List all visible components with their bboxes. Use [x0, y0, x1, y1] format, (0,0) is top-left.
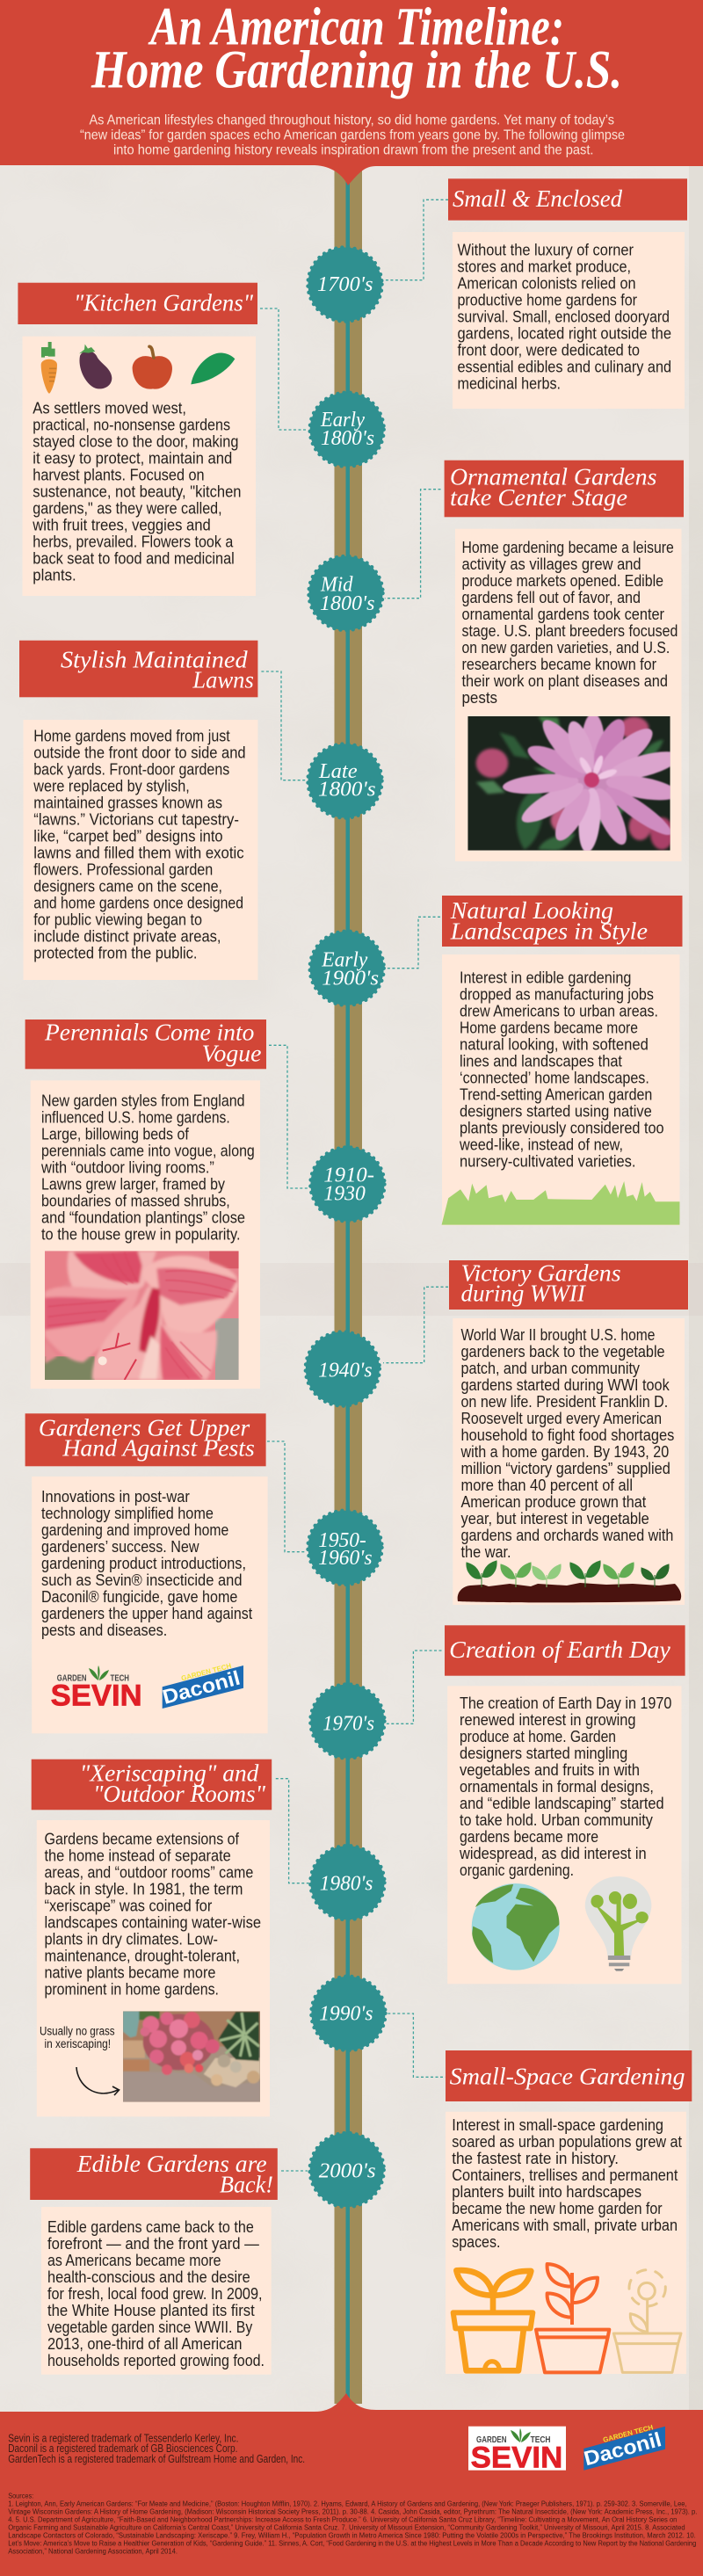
heading: Vogue: [202, 1040, 261, 1066]
heading: [445, 461, 684, 517]
text block: the home instead of separate: [44, 1847, 231, 1865]
text block: plants in dry climates. Low-: [44, 1931, 218, 1948]
badge: 2000's: 2000's: [319, 2159, 376, 2182]
text block: planters built into hardscapes: [452, 2183, 641, 2201]
heading: Small-Space Gardening: [450, 2064, 685, 2090]
text block: gardens," as they were called,: [33, 500, 222, 518]
text block: [459, 969, 664, 1170]
heading: [25, 1413, 266, 1466]
text block: their work on plant diseases and: [462, 672, 668, 690]
heading: "Outdoor Rooms": [93, 1781, 266, 1807]
heading: [30, 2148, 278, 2200]
connector: 1990's: [388, 2014, 446, 2077]
text block: and “foundation plantings” close: [41, 1208, 245, 1226]
connector: 1910-1930: [269, 1045, 308, 1188]
text block: Interest in edible gardening: [460, 969, 631, 986]
text block: lines and landscapes that: [460, 1052, 622, 1070]
logo: Sevin: GARDEN: [57, 1674, 86, 1684]
text block: weed-like, instead of new,: [459, 1136, 623, 1153]
icon: potted plants: [453, 2264, 681, 2372]
photo: pink amaryllis: [45, 1251, 239, 1380]
text block: productive home gardens for: [457, 292, 637, 309]
text block: activity as villages grew and: [462, 555, 641, 573]
text block: back in style. In 1981, the term: [44, 1881, 243, 1898]
text block: stores and market produce,: [457, 258, 631, 276]
text block: As settlers moved west,: [33, 400, 186, 417]
text block: with fruit trees, veggies and: [32, 517, 211, 534]
text block: spaces.: [452, 2233, 500, 2251]
text block: Innovations in post-war: [41, 1488, 190, 1506]
icons: vegetables: [41, 342, 235, 394]
connector: 1970's: [387, 1651, 441, 1723]
text block: prominent in home gardens.: [44, 1981, 219, 1999]
sources: Landscape Contactors of Colorado, “Sustainable Landscaping: Xeriscape.” 9. Frey, William H., “Population Growth in Metro America Since 1980: Putting the Volatile 2000s in Perspective,” The Brookings Institution, March 2012. 10.: [8, 2532, 696, 2540]
intro text: [80, 113, 625, 158]
text block: lawns and filled them with exotic: [33, 844, 244, 861]
card background: [446, 2112, 686, 2374]
photo: xeriscape garden: [123, 2011, 260, 2102]
badge: 1950-1960's: 1950-: [318, 1529, 366, 1552]
footer logo: Sevin: [468, 2427, 566, 2474]
icon: tree light bulb: [585, 1876, 651, 1971]
text block: herbs, prevailed. Flowers took a: [33, 533, 234, 551]
badge: early 1800's: 1800's: [321, 427, 374, 450]
panel: creation of earth day: [445, 1625, 685, 1984]
footer logo: Sevin: SEVIN: [471, 2441, 562, 2474]
text block: landscapes containing water-wise: [44, 1914, 261, 1932]
text block: ornamentals in formal designs,: [460, 1778, 654, 1796]
arrow: [76, 2067, 120, 2095]
text block: [33, 727, 246, 961]
text block: forefront — and the front yard —: [47, 2235, 259, 2253]
footer logo: Daconil: GARDEN TECH: [602, 2423, 654, 2444]
text block: [44, 1831, 261, 1999]
text block: technology simplified home: [41, 1505, 214, 1522]
sources: [8, 2493, 697, 2556]
panel: gardeners get upper hand: [25, 1413, 268, 1733]
card background: [455, 529, 682, 861]
card background: [453, 232, 685, 409]
text block: households reported growing food.: [47, 2352, 265, 2369]
heading: [446, 2050, 692, 2101]
badge: 1950-1960's: 1960's: [318, 1547, 373, 1570]
text block: World War II brought U.S. home: [460, 1326, 655, 1344]
text block: The creation of Earth Day in 1970: [460, 1694, 671, 1712]
text block: pests: [462, 689, 497, 707]
badge: early 1900's: [310, 932, 384, 1005]
card background: [447, 1686, 682, 1984]
sources: 4. 5. U.S. Department of Agriculture, “Faith-Based and Neighborhood Partnerships: Increase Access to Fresh Produce.” 6. University of California Santa Cruz Library, “Timeline: Cultivating a Movement, An Oral History Series on: [8, 2516, 677, 2524]
badge: 1940's: [306, 1332, 380, 1406]
heading: Stylish Maintained: [61, 646, 248, 672]
icon: seedlings in soil: [458, 1561, 681, 1602]
heading: [32, 1760, 272, 1810]
text block: native plants became more: [44, 1964, 215, 1982]
text block: [459, 1694, 671, 1879]
text block: gardens started during WWI took: [460, 1376, 670, 1394]
text block: essential edibles and culinary and: [457, 359, 671, 376]
badge: 1700's: 1700's: [317, 273, 373, 296]
text block: [47, 2218, 265, 2369]
heading: Perennials Come into: [44, 1019, 254, 1045]
trademarks text: [8, 2432, 305, 2465]
text block: became the new home garden for: [452, 2200, 663, 2217]
timeline trunk: [334, 167, 362, 2404]
footer logo: Daconil: Daconil: [582, 2427, 663, 2470]
text block: plants previously considered too: [460, 1119, 664, 1136]
card background: [453, 1318, 685, 1605]
text block: maintenance, drought-tolerant,: [44, 1948, 240, 1965]
badge: 1970's: [310, 1684, 384, 1758]
footer logo: Sevin: GARDEN: [476, 2435, 506, 2445]
text block: the White House planted its first: [47, 2302, 255, 2319]
text block: soared as urban populations grew at: [452, 2133, 682, 2151]
text block: Roosevelt urged every American: [460, 1410, 662, 1427]
heading: Ornamental Gardens: [450, 464, 656, 490]
panel: kitchen gardens: [18, 283, 257, 596]
caption: [40, 2025, 115, 2050]
connector: 1700's: [385, 200, 448, 280]
badge: 1980's: 1980's: [320, 1873, 373, 1896]
text block: to the house grew in popularity.: [41, 1225, 241, 1243]
text block: researchers became known for: [462, 656, 656, 673]
badge: early 1800's: Early: [320, 409, 365, 432]
text block: medicinal herbs.: [457, 375, 561, 393]
heading: Victory Gardens: [460, 1260, 621, 1287]
heading: Back!: [220, 2171, 273, 2197]
text block: plants.: [33, 567, 76, 584]
text block: perennials came into vogue, along: [41, 1142, 255, 1159]
panel: edible gardens are back: [30, 2148, 278, 2375]
text block: stage. U.S. plant breeders focused: [462, 622, 678, 640]
connector: 2000's: [281, 2170, 308, 2172]
badge: 1910-1930: 1910-: [323, 1164, 374, 1186]
text block: patch, and urban community: [460, 1360, 640, 1377]
text block: 2013, one-third of all American: [47, 2335, 243, 2353]
text block: the war.: [460, 1543, 511, 1561]
connector: 1940's: [383, 1287, 448, 1363]
text block: areas, and “outdoor rooms” came: [44, 1864, 253, 1882]
panel: victory gardens: [449, 1260, 688, 1605]
text block: more than 40 percent of all: [460, 1477, 633, 1494]
text block: on new garden varieties, and U.S.: [462, 639, 670, 657]
text block: American produce grown that: [460, 1493, 646, 1511]
text block: gardeners the upper hand against: [41, 1605, 252, 1622]
caption: Usually no grass: [40, 2025, 115, 2038]
badge: 1980's: [310, 1846, 384, 1919]
badge: 1950-1960's: [308, 1511, 381, 1585]
text block: gardens became more: [460, 1828, 598, 1846]
text block: Home gardening became a leisure: [462, 539, 674, 556]
text block: with a home garden. By 1943, 20: [460, 1443, 669, 1461]
text block: dropped as manufacturing jobs: [460, 985, 654, 1003]
panel: ornamental gardens: [445, 461, 684, 861]
heading: Landscapes in Style: [450, 918, 648, 944]
badge: late 1800's: Late: [318, 760, 358, 783]
panel: small-space gardening: [446, 2050, 692, 2374]
heading: [19, 641, 257, 697]
text block: “xeriscape” was coined for: [44, 1898, 212, 1915]
badge: early 1900's: 1900's: [322, 968, 379, 990]
text block: on new life. President Franklin D.: [460, 1393, 668, 1411]
badge: late 1800's: 1800's: [318, 779, 376, 802]
sources: Organic Farming and Sustainable Agriculture on California’s Central Coast,” University of California Santa Cruz. 7. University of Missouri Extension, “Community Gardening Toolkit,” University of Missouri, April 2015. 8. Associated: [8, 2524, 685, 2532]
text block: health-conscious and the desire: [47, 2268, 250, 2286]
badge: mid 1800's: 1800's: [320, 592, 374, 615]
heading: Lawns: [192, 666, 254, 693]
badge: 1910-1930: [310, 1148, 384, 1222]
icon: globe: [472, 1883, 560, 1970]
heading: during WWII: [460, 1281, 587, 1307]
text block: pests and diseases.: [41, 1622, 167, 1639]
text block: and “edible landscaping” started: [460, 1795, 664, 1812]
text block: front door, were dedicated to: [457, 342, 640, 359]
card background: [41, 2207, 272, 2375]
text block: Interest in small-space gardening: [452, 2116, 663, 2134]
trademarks text: GardenTech is a registered trademark of Gulfstream Home and Garden, Inc.: [8, 2453, 305, 2465]
text block: harvest plants. Focused on: [33, 467, 205, 484]
text block: produce at home. Garden: [460, 1728, 616, 1745]
text block: Without the luxury of corner: [457, 242, 634, 259]
text block: influenced U.S. home gardens.: [41, 1108, 230, 1126]
panel: xeriscaping: [32, 1760, 272, 2116]
badge: 2000's: [310, 2133, 384, 2207]
text block: gardens, located right outside the: [457, 325, 671, 343]
card background: [442, 954, 680, 1225]
panel: perennials come into vogue: [25, 1019, 266, 1389]
heading: Edible Gardens are: [76, 2151, 267, 2177]
badge: late 1800's: [308, 744, 381, 817]
heading: [25, 1019, 266, 1069]
logo: Daconil: GARDEN TECH: [180, 1662, 232, 1682]
text block: [457, 242, 671, 393]
text block: gardeners’ success. New: [41, 1538, 199, 1556]
text block: Home gardens became more: [460, 1019, 638, 1036]
sources: Association,” National Gardening Association, April 2014.: [8, 2548, 178, 2556]
heading: Hand Against Pests: [62, 1435, 255, 1462]
text block: include distinct private areas,: [33, 927, 221, 945]
text block: designers started using native: [460, 1102, 652, 1120]
logo: Sevin: [51, 1665, 142, 1713]
intro text: As American lifestyles changed throughout history, so did home gardens. Yet many of today’s: [90, 113, 614, 128]
heading: Small & Enclosed: [453, 185, 622, 212]
panel: natural looking landscapes: [442, 896, 682, 1225]
text block: drew Americans to urban areas.: [460, 1002, 658, 1020]
text block: [462, 539, 678, 707]
text block: [460, 1326, 674, 1561]
text block: it easy to protect, maintain and: [33, 450, 232, 468]
text block: practical, no-nonsense gardens: [33, 417, 230, 434]
text block: Edible gardens came back to the: [47, 2218, 254, 2236]
text block: Gardens became extensions of: [44, 1831, 240, 1848]
text block: American colonists relied on: [457, 275, 636, 293]
text block: gardening product introductions,: [41, 1555, 246, 1572]
caption: in xeriscaping!: [44, 2037, 111, 2050]
connector: mid 1800's: [385, 490, 441, 599]
panel: stylish maintained lawns: [19, 641, 257, 980]
badge: early 1900's: Early: [321, 948, 368, 971]
text block: [32, 400, 241, 584]
text block: back seat to food and medicinal: [33, 550, 235, 568]
text block: stayed close to the door, making: [33, 433, 238, 451]
text block: Containers, trellises and permanent: [452, 2166, 678, 2184]
text block: Daconil® fungicide, gave home: [41, 1588, 237, 1606]
text block: vegetables and fruits in with: [460, 1761, 640, 1779]
badge: mid 1800's: Mid: [320, 574, 353, 597]
text block: the fastest rate in history.: [452, 2150, 619, 2167]
trademarks text: Sevin is a registered trademark of Tessenderlo Kerley, Inc.: [8, 2432, 238, 2444]
card background: [23, 720, 257, 980]
text block: Lawns grew larger, framed by: [41, 1175, 225, 1193]
trademarks text: Daconil is a registered trademark of GB Biosciences Corp.: [8, 2442, 237, 2455]
heading: "Kitchen Gardens": [74, 289, 254, 316]
badge: 1970's: 1970's: [323, 1712, 374, 1735]
connector: 1950-1960's: [267, 1441, 306, 1552]
photo: pink flower: [467, 714, 682, 853]
title: [91, 0, 622, 99]
logo: Sevin: SEVIN: [51, 1680, 142, 1713]
text block: New garden styles from England: [41, 1092, 245, 1109]
text block: year, but interest in vegetable: [460, 1510, 649, 1527]
card background: [32, 1477, 268, 1733]
text block: Trend-setting American garden: [460, 1085, 652, 1103]
logo: Sevin: TECH: [111, 1674, 129, 1684]
heading: [442, 896, 682, 947]
footer: [0, 2393, 703, 2576]
text block: gardening and improved home: [41, 1521, 228, 1539]
text block: designers started mingling: [460, 1745, 627, 1762]
text block: [452, 2116, 682, 2251]
text block: survival. Small, enclosed dooryard: [457, 308, 670, 326]
heading: Gardeners Get Upper: [39, 1414, 250, 1440]
heading: [445, 1625, 685, 1676]
text block: produce markets opened. Edible: [462, 572, 663, 590]
heading: [18, 283, 257, 324]
panel: small and enclosed: [448, 178, 687, 409]
text block: to take hold. Urban community: [460, 1811, 653, 1829]
text block: as Americans became more: [47, 2252, 221, 2269]
badge: mid 1800's: [309, 556, 383, 630]
badge: 1940's: 1940's: [318, 1360, 373, 1382]
text block: for public viewing began to: [33, 911, 202, 928]
badge: 1990's: [311, 1977, 385, 2050]
card background: [31, 1080, 260, 1389]
badge: 1910-1930: 1930: [323, 1183, 366, 1206]
logo: Daconil: Daconil: [160, 1666, 243, 1709]
text block: designers came on the scene,: [33, 877, 222, 895]
text block: nursery-cultivated varieties.: [460, 1152, 636, 1170]
heading: Natural Looking: [450, 897, 613, 924]
text block: Home gardens moved from just: [33, 727, 230, 744]
text block: back yards. Front-door gardens: [33, 760, 229, 778]
badge: 1990's: 1990's: [319, 2002, 373, 2025]
connector: early 1900's: [386, 917, 440, 969]
connector: early 1800's: [260, 308, 308, 430]
text block: organic gardening.: [460, 1861, 574, 1879]
text block: like, “carpet bed” designs into: [33, 827, 223, 845]
text block: vegetable garden since WWII. By: [47, 2318, 252, 2336]
text block: [40, 1092, 255, 1243]
text block: [41, 1488, 252, 1639]
card background: [23, 337, 256, 596]
connector: 1980's: [276, 1779, 309, 1883]
header banner: [0, 0, 703, 185]
badge: 1700's: [308, 248, 381, 322]
intro text: “new ideas” for garden spaces echo American gardens from years gone by. The following glimpse: [80, 128, 625, 143]
text block: natural looking, with softened: [460, 1035, 649, 1053]
text block: Americans with small, private urban: [452, 2217, 678, 2234]
text block: such as Sevin® insecticide and: [41, 1571, 243, 1589]
text block: sustenance, not beauty, "kitchen: [33, 483, 241, 501]
text block: renewed interest in growing: [460, 1711, 636, 1729]
text block: ‘connected’ home landscapes.: [460, 1069, 649, 1086]
text block: Large, billowing beds of: [41, 1125, 190, 1143]
badge: early 1800's: [310, 393, 384, 467]
text block: and home gardens once designed: [33, 894, 243, 911]
footer logo: Sevin: TECH: [531, 2435, 550, 2445]
card background: [37, 1820, 270, 2116]
text block: outside the front door to side and: [33, 744, 246, 761]
text block: ornamental gardens took center: [462, 606, 664, 623]
heading: Creation of Earth Day: [449, 1636, 670, 1663]
connector: late 1800's: [261, 671, 306, 780]
text block: boundaries of massed shrubs,: [41, 1192, 230, 1209]
heading: "Xeriscaping" and: [80, 1760, 259, 1787]
text block: protected from the public.: [33, 944, 197, 961]
sources: Sources:: [8, 2493, 33, 2500]
text block: household to fight food shortages: [460, 1426, 674, 1444]
heading: [448, 178, 687, 221]
intro text: into home gardening history reveals inspiration drawn from the present and the past.: [113, 143, 594, 158]
text block: maintained grasses known as: [33, 794, 222, 811]
text block: “lawns.” Victorians cut tapestry-: [33, 810, 239, 828]
text block: with “outdoor living rooms.”: [40, 1158, 214, 1176]
icon: grass: [442, 1181, 679, 1225]
heading: take Center Stage: [450, 484, 627, 511]
text block: for fresh, local food grew. In 2009,: [47, 2285, 262, 2303]
text block: were replaced by stylish,: [33, 777, 190, 795]
text block: gardens and orchards waned with: [460, 1527, 673, 1544]
text block: gardens fell out of favor, and: [462, 589, 641, 606]
text block: gardeners back to the vegetable: [460, 1343, 665, 1361]
text block: widespread, as did interest in: [459, 1845, 647, 1862]
text block: flowers. Professional garden: [33, 860, 213, 878]
text block: million “victory gardens” supplied: [460, 1460, 670, 1477]
heading: [449, 1260, 688, 1310]
